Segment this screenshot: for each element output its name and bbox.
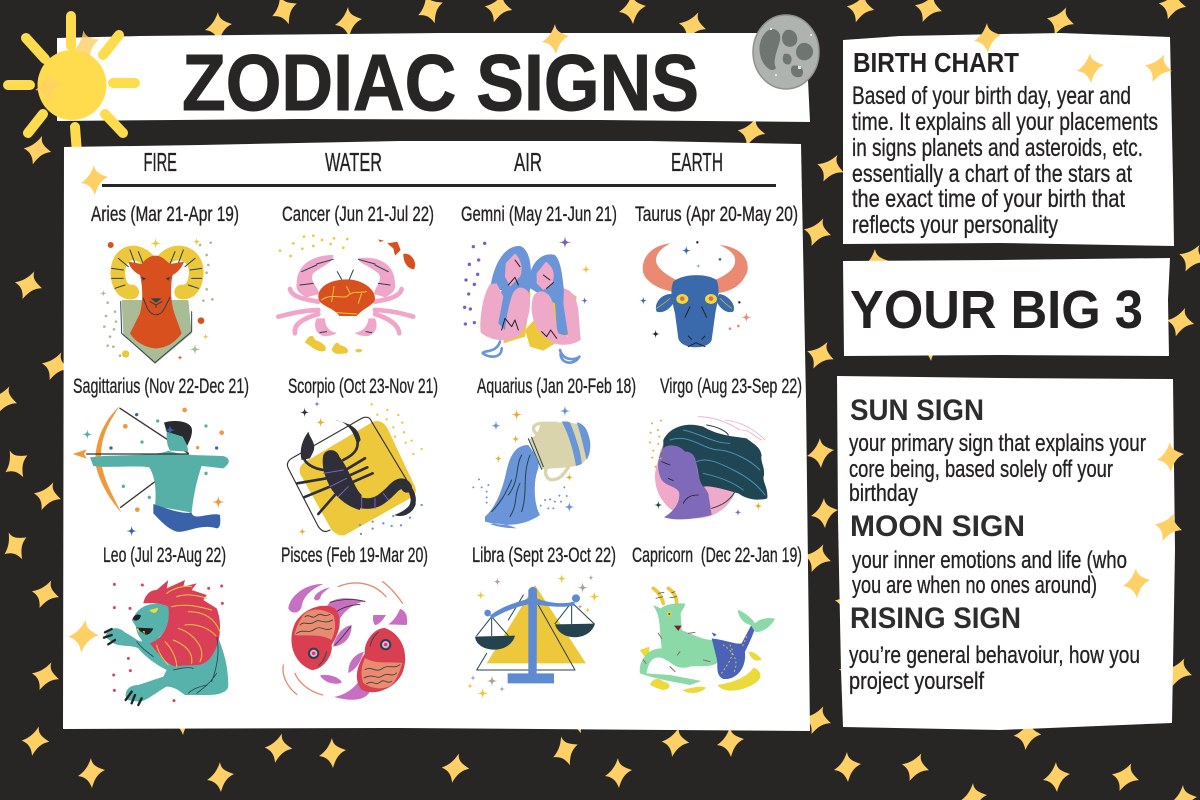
sign: Pisces: Pisces (Feb 19-Mar 20): [281, 544, 428, 567]
sign: Cancer: [278, 203, 434, 354]
birth chart description: the exact time of your birth that: [852, 185, 1125, 213]
heading: birth chart: BIRTH CHART: [853, 47, 1019, 78]
sign: Capricorn: Capricorn (Dec 22-Jan 19): [632, 544, 802, 567]
sign: Scorpio: Scorpio (Oct 23-Nov 21): [288, 375, 438, 398]
birth chart description: essentially a chart of the stars at: [852, 160, 1132, 188]
sign: Taurus: Taurus (Apr 20-May 20): [635, 203, 798, 226]
sun sign: core being, based solely off your: [849, 456, 1113, 483]
sign: Aries: [91, 203, 239, 364]
sign: Aries: Aries (Mar 21-Apr 19): [91, 203, 239, 226]
panel: your big 3: [843, 258, 1170, 356]
rising sign: [849, 602, 1140, 695]
icon: moon: [753, 15, 819, 89]
sun sign: birthday: [849, 480, 918, 507]
sign: Leo: [103, 544, 228, 705]
birth chart description: [852, 82, 1158, 239]
sign: Taurus: [635, 203, 798, 347]
overlay stars: [35, 23, 1187, 655]
sign: Aquarius: Aquarius (Jan 20-Feb 18): [477, 375, 636, 398]
sign: Aquarius: [473, 375, 636, 528]
element headings: WATER: [325, 147, 382, 177]
icon: sun: [8, 16, 135, 153]
rising sign: RISING SIGN: [850, 602, 1021, 635]
sign: Sagittarius: Sagittarius (Nov 22-Dec 21): [73, 375, 249, 398]
sign: Cancer: Cancer (Jun 21-Jul 22): [282, 203, 434, 226]
sign: Capricorn: [632, 544, 802, 693]
title banner: [57, 33, 810, 127]
sign: Sagittarius: [73, 375, 249, 537]
title: ZODIAC SIGNS: [182, 38, 699, 127]
sign: Libra: Libra (Sept 23-Oct 22): [472, 544, 616, 567]
sign: Gemini: Gemni (May 21-Jun 21): [461, 203, 617, 226]
moon sign: [850, 510, 1127, 599]
sign: Gemini: [461, 203, 617, 363]
sign: Scorpio: [287, 375, 438, 536]
element headings: [144, 147, 723, 177]
element headings: EARTH: [671, 147, 723, 177]
moon sign: MOON SIGN: [850, 510, 1025, 543]
element headings: FIRE: [144, 147, 177, 177]
element headings: AIR: [514, 147, 542, 177]
panel: signs card: [63, 141, 810, 731]
panel: sun moon rising: [837, 376, 1175, 730]
sign: Virgo: Virgo (Aug 23-Sep 22): [660, 375, 802, 398]
sun sign: SUN SIGN: [850, 394, 984, 427]
sun sign: [849, 394, 1146, 507]
rising sign: project yourself: [849, 668, 984, 695]
birth chart description: reflects your personality: [852, 211, 1058, 239]
panel: birth chart: [843, 33, 1174, 246]
sign: Pisces: [281, 544, 428, 700]
moon sign: you are when no ones around): [852, 572, 1097, 599]
moon sign: your inner emotions and life (who: [852, 547, 1127, 574]
heading: your big 3: YOUR BIG 3: [850, 280, 1143, 340]
sign: Libra: [467, 544, 616, 699]
sign: Leo: Leo (Jul 23-Aug 22): [103, 544, 226, 567]
sign: Virgo: [650, 375, 802, 519]
